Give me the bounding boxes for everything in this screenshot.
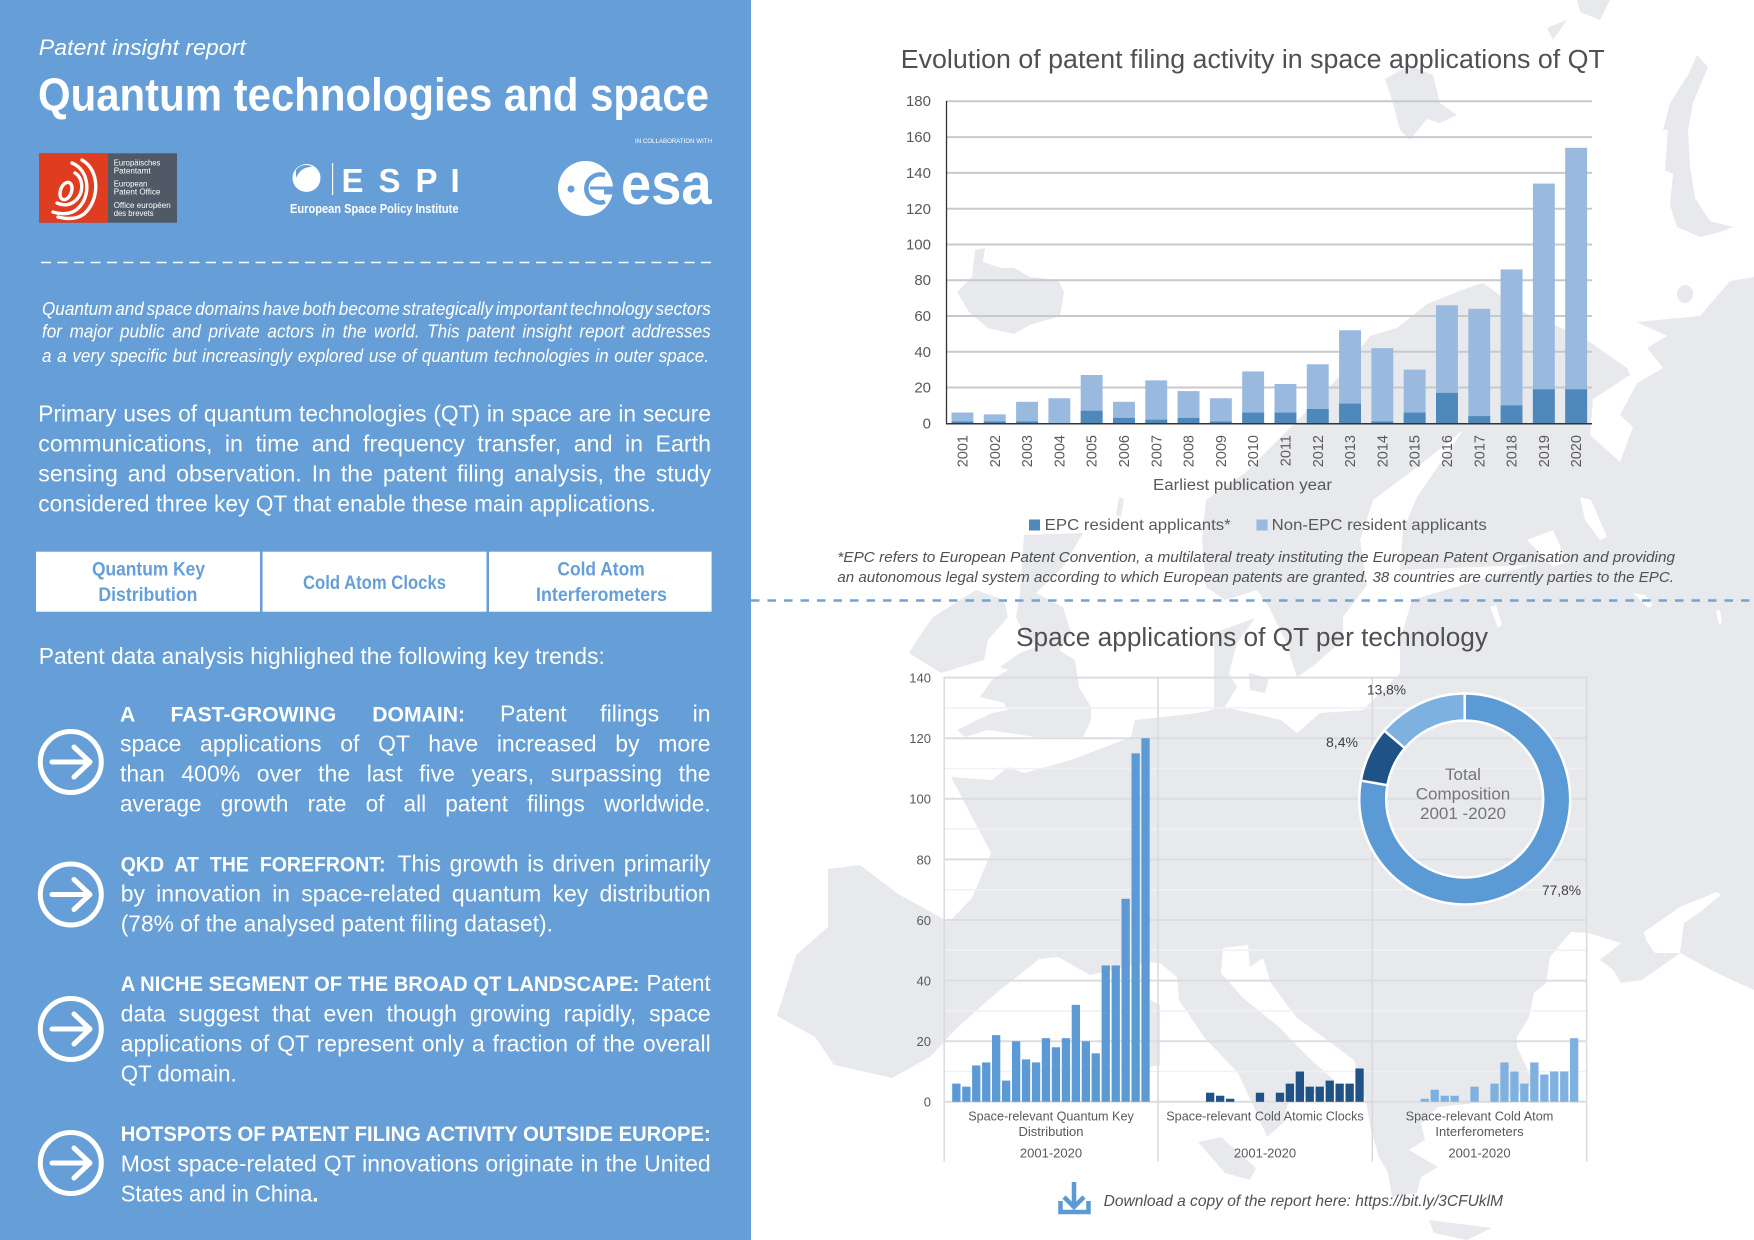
stacked bar chart: patent filings by year: 2013: [1343, 435, 1359, 467]
bar chart: applications per technology: 2001-2020: [1448, 1146, 1511, 1160]
stacked bar chart: patent filings by year: 100: [906, 236, 931, 254]
stacked bar chart: patent filings by year: 2014: [1375, 435, 1391, 467]
chart legend: Non-EPC resident applicants: [1272, 517, 1487, 534]
donut chart: total composition: 13,8%: [1367, 682, 1406, 698]
trend 3: niche segment: QT domain.: [121, 1061, 237, 1087]
stacked bar chart: patent filings by year: 2016: [1440, 435, 1456, 467]
stacked bar chart: patent filings by year: 2011: [1278, 435, 1294, 466]
trend 3: niche segment: Patent: [646, 970, 711, 996]
logo: European Patent Office: [39, 153, 177, 223]
logo: ESA: [558, 138, 712, 217]
download text: Download a copy of the report here: https://bit.ly/3CFUklM: [1104, 1193, 1504, 1210]
stacked bar chart: patent filings by year: 2002: [988, 435, 1004, 467]
primary uses paragraph: sensing and observation. In the patent filing analysis, the study: [38, 461, 711, 487]
bar chart: applications per technology: 120: [909, 731, 931, 746]
trend 1: fast-growing domain: Patent filings in: [500, 701, 711, 727]
trend 3: niche segment: [121, 970, 711, 1087]
donut chart: total composition: [1326, 682, 1581, 904]
trend 2: QKD at the forefront: [121, 851, 711, 937]
stacked bar chart: patent filings by year: 2003: [1020, 435, 1036, 467]
bar chart: applications per technology: Distribution: [1018, 1124, 1084, 1139]
title: Quantum technologies and space: [38, 69, 709, 121]
intro italic paragraph: for major public and private actors in the world. This patent insight report addresses: [42, 321, 711, 341]
stacked bar chart: patent filings by year: 2006: [1117, 435, 1133, 467]
trend 2: QKD at the forefront: (78% of the analysed patent filing dataset).: [121, 911, 553, 937]
logo: ESPI: [290, 162, 460, 216]
panel background: [0, 0, 751, 1240]
icon: download: [1060, 1182, 1088, 1212]
logo: European Patent Office: Europäisches: [114, 158, 160, 168]
table of three key technologies: [36, 552, 712, 612]
trend 2: QKD at the forefront: This growth is driven primarily: [398, 851, 711, 877]
stacked bar chart: patent filings by year: 60: [914, 308, 931, 325]
stacked bar chart: patent filings by year: 2010: [1246, 435, 1262, 467]
primary uses paragraph: [38, 401, 711, 517]
trend 1: fast-growing domain: average growth rate of all patent filings worldwide.: [120, 791, 711, 817]
icon: arrow 2: [40, 864, 101, 925]
table of three key technologies: Distribution: [98, 585, 197, 606]
stacked bar chart: patent filings by year: 2019: [1537, 435, 1553, 467]
icon: arrow 1: [40, 732, 101, 792]
EPC footnote: [837, 549, 1676, 586]
stacked bar chart: patent filings by year: 180: [906, 93, 931, 110]
stacked bar chart: patent filings by year: 2007: [1149, 435, 1165, 467]
logo: ESA: esa: [621, 152, 712, 217]
stacked bar chart: patent filings by year: 2015: [1408, 435, 1424, 467]
stacked bar chart: patent filings by year: 120: [906, 201, 931, 218]
trend 4: hotspots outside Europe: States and in China.: [121, 1181, 318, 1207]
heading: per technology chart: Space applications of QT per technology: [1016, 624, 1488, 652]
donut chart: total composition: 8,4%: [1326, 735, 1358, 750]
stacked bar chart: patent filings by year: 20: [914, 380, 931, 396]
trend 4: hotspots outside Europe: HOTSPOTS OF PATENT FILING ACTIVITY OUTSIDE EUROPE:: [121, 1123, 711, 1146]
bar chart: applications per technology: 140: [909, 670, 931, 686]
logo: ESA: IN COLLABORATION WITH: [635, 138, 712, 145]
report label: Patent insight report: [39, 35, 247, 60]
icon: arrow 4: [40, 1132, 101, 1194]
bar chart: applications per technology: 80: [917, 852, 931, 868]
primary uses paragraph: communications, in time and frequency transfer, and in Earth: [38, 431, 711, 457]
bar chart: applications per technology: 0: [924, 1094, 931, 1110]
intro italic paragraph: Quantum and space domains have both become strategically important technology sectors: [42, 299, 711, 319]
stacked bar chart: patent filings by year: 2009: [1214, 435, 1230, 467]
logo: European Patent Office: European: [114, 178, 148, 188]
logo: European Patent Office: Patent Office: [114, 186, 161, 196]
trend 1: fast-growing domain: [120, 701, 711, 817]
table of three key technologies: Cold Atom: [557, 560, 645, 581]
trend 2: QKD at the forefront: QKD AT THE FOREFRONT:: [121, 854, 385, 877]
table of three key technologies: Interferometers: [536, 585, 667, 606]
intro italic paragraph: a a very specific but increasingly explored use of quantum technologies in outer space.: [42, 346, 709, 366]
EPC footnote: *EPC refers to European Patent Convention, a multilateral treaty instituting the European Patent Organisation and providing: [837, 549, 1676, 566]
logo: European Patent Office: Patentamt: [114, 166, 151, 176]
stacked bar chart: patent filings by year: 40: [914, 344, 931, 361]
trend 3: niche segment: A NICHE SEGMENT OF THE BROAD QT LANDSCAPE:: [121, 973, 639, 996]
bar chart: applications per technology: 100: [909, 792, 931, 806]
trend 1: fast-growing domain: space applications of QT have increased by more: [120, 731, 711, 757]
icon: arrow 3: [40, 998, 101, 1060]
logo: European Patent Office: Office européen: [114, 200, 171, 210]
stacked bar chart: patent filings by year: 0: [923, 416, 931, 432]
heading: filing activity chart: Evolution of patent filing activity in space applications of QT: [901, 46, 1605, 74]
logo: ESPI: European Space Policy Institute: [290, 201, 458, 216]
chart legend: [1029, 517, 1487, 534]
bar chart: applications per technology: [909, 670, 1587, 1162]
stacked bar chart: patent filings by year: 140: [906, 165, 931, 182]
trend 3: niche segment: applications of QT represent only a fraction of the overall: [121, 1031, 711, 1057]
panel: left blue column: [0, 0, 751, 1240]
bar chart: applications per technology: Interferometers: [1435, 1124, 1524, 1139]
table of three key technologies: Cold Atom Clocks: [303, 573, 446, 594]
chart legend: EPC resident applicants*: [1045, 517, 1231, 534]
stacked bar chart: patent filings by year: Earliest publication year: [1153, 477, 1332, 494]
bar chart: applications per technology: Space-relevant Quantum Key: [968, 1108, 1134, 1124]
bar chart: applications per technology: 2001-2020: [1020, 1146, 1082, 1160]
stacked bar chart: patent filings by year: 2004: [1052, 435, 1068, 467]
background map of Europe: [777, 0, 1754, 1240]
stacked bar chart: patent filings by year: 2001: [956, 435, 972, 467]
logo: European Patent Office: des brevets: [114, 208, 154, 218]
stacked bar chart: patent filings by year: 2012: [1311, 435, 1327, 467]
stacked bar chart: patent filings by year: [906, 93, 1592, 494]
intro italic paragraph: [42, 299, 711, 366]
stacked bar chart: patent filings by year: 2005: [1085, 435, 1101, 467]
bar chart: applications per technology: 60: [917, 913, 931, 928]
donut chart: total composition: Total: [1445, 765, 1481, 784]
donut chart: total composition: Composition: [1416, 784, 1510, 804]
primary uses paragraph: considered three key QT that enable these main applications.: [38, 491, 656, 517]
trend 4: hotspots outside Europe: Most space-related QT innovations originate in the United: [121, 1151, 711, 1177]
trend 1: fast-growing domain: than 400% over the last five years, surpassing the: [120, 761, 711, 787]
trend 1: fast-growing domain: A FAST-GROWING DOMAIN:: [120, 704, 465, 727]
bar chart: applications per technology: Space-relevant Cold Atom: [1406, 1108, 1553, 1124]
donut chart: total composition: 2001 -2020: [1420, 804, 1506, 823]
key trends intro: Patent data analysis highlighed the following key trends:: [39, 643, 605, 669]
stacked bar chart: patent filings by year: 80: [914, 272, 931, 289]
bar chart: applications per technology: 20: [917, 1034, 931, 1049]
stacked bar chart: patent filings by year: 2008: [1182, 435, 1198, 467]
stacked bar chart: patent filings by year: 2017: [1472, 435, 1488, 467]
logo: ESPI: ESPI: [342, 162, 460, 199]
trend 4: hotspots outside Europe: [121, 1123, 711, 1207]
trend 3: niche segment: data suggest that even though growing rapidly, space: [121, 1001, 711, 1027]
stacked bar chart: patent filings by year: 2018: [1505, 435, 1521, 467]
trend 2: QKD at the forefront: by innovation in space-related quantum key distribution: [121, 881, 711, 907]
bar chart: applications per technology: 40: [917, 974, 931, 988]
stacked bar chart: patent filings by year: 160: [906, 129, 931, 146]
EPC footnote: an autonomous legal system according to which European patents are granted. 38 countries are currently parties to the EPC.: [837, 569, 1674, 586]
bar chart: applications per technology: Space-relevant Cold Atomic Clocks: [1166, 1108, 1364, 1124]
stacked bar chart: patent filings by year: 2020: [1569, 435, 1585, 467]
bar chart: applications per technology: 2001-2020: [1234, 1146, 1296, 1160]
table of three key technologies: Quantum Key: [92, 560, 205, 581]
donut chart: total composition: 77,8%: [1542, 883, 1581, 898]
primary uses paragraph: Primary uses of quantum technologies (QT) in space are in secure: [38, 401, 711, 427]
